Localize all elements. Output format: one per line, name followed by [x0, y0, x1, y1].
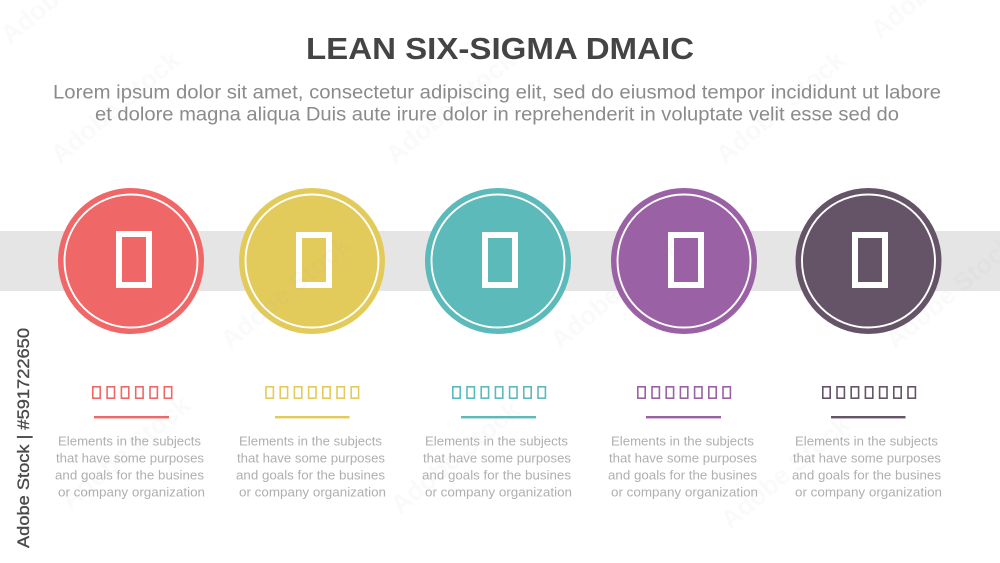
underline — [275, 416, 350, 418]
icon: purple circle badge — [611, 188, 757, 334]
description text: and goals for the busines — [422, 468, 571, 483]
description text: or company organization — [239, 485, 386, 500]
panel: step 2 yellow — [236, 188, 386, 500]
description text: Elements in the subjects — [611, 434, 755, 449]
subtitle text: Lorem ipsum dolor sit amet, consectetur adipiscing elit, sed do eiusmod tempor incididunt ut labore — [53, 82, 941, 104]
faint diagonal watermarks: Adobe Stock — [385, 394, 526, 520]
heading placeholder glyphs — [638, 387, 730, 398]
description text: and goals for the busines — [236, 468, 385, 483]
description text: and goals for the busines — [792, 468, 941, 483]
faint diagonal watermarks: Adobe Stock — [715, 409, 856, 535]
underline — [831, 416, 906, 418]
background band — [0, 231, 1000, 291]
description text — [792, 434, 942, 500]
faint diagonal watermarks: Adobe Stock — [45, 44, 186, 170]
description text: Elements in the subjects — [239, 434, 383, 449]
faint diagonal watermarks: Adobe Stock — [55, 389, 196, 515]
panel: step 3 teal — [422, 188, 572, 500]
description text: that have some purposes — [793, 451, 941, 466]
icon: dark plum circle badge — [796, 188, 942, 334]
heading placeholder glyphs — [266, 387, 359, 398]
icon: red circle badge — [58, 188, 204, 334]
heading placeholder glyphs — [93, 387, 172, 398]
description text: and goals for the busines — [55, 468, 204, 483]
panel: step 5 dark plum — [792, 188, 942, 500]
description text: or company organization — [611, 485, 758, 500]
description text: or company organization — [58, 485, 205, 500]
icon: yellow circle badge — [239, 188, 385, 334]
subtitle text — [53, 82, 941, 126]
faint diagonal watermarks: Adobe Stock — [710, 44, 851, 170]
title: LEAN SIX-SIGMA DMAIC — [306, 31, 694, 66]
description text — [422, 434, 572, 500]
underline — [461, 416, 536, 418]
heading placeholder glyphs — [823, 387, 915, 398]
description text: that have some purposes — [237, 451, 385, 466]
description text: that have some purposes — [56, 451, 204, 466]
underline — [94, 416, 169, 418]
icon: teal circle badge — [425, 188, 571, 334]
description text: that have some purposes — [609, 451, 757, 466]
heading placeholder glyphs — [453, 387, 545, 398]
description text: or company organization — [425, 485, 572, 500]
description text: Elements in the subjects — [425, 434, 569, 449]
faint diagonal watermarks: Adobe Stock — [545, 229, 686, 355]
faint diagonal watermarks: Adobe Stock — [380, 44, 521, 170]
description text — [236, 434, 386, 500]
panel: step 4 purple — [608, 188, 758, 500]
description text: or company organization — [795, 485, 942, 500]
faint diagonal watermarks: Adobe Stock — [215, 229, 356, 355]
description text — [608, 434, 758, 500]
subtitle text: et dolore magna aliqua Duis aute irure dolor in reprehenderit in voluptate velit esse sed do — [95, 104, 899, 126]
description text: Elements in the subjects — [795, 434, 939, 449]
panel: step 1 red — [55, 188, 205, 500]
description text: Elements in the subjects — [58, 434, 202, 449]
description text: and goals for the busines — [608, 468, 757, 483]
description text: that have some purposes — [423, 451, 571, 466]
description text — [55, 434, 205, 500]
underline — [646, 416, 721, 418]
stock id side label: Adobe Stock | #591722650 — [14, 328, 33, 548]
